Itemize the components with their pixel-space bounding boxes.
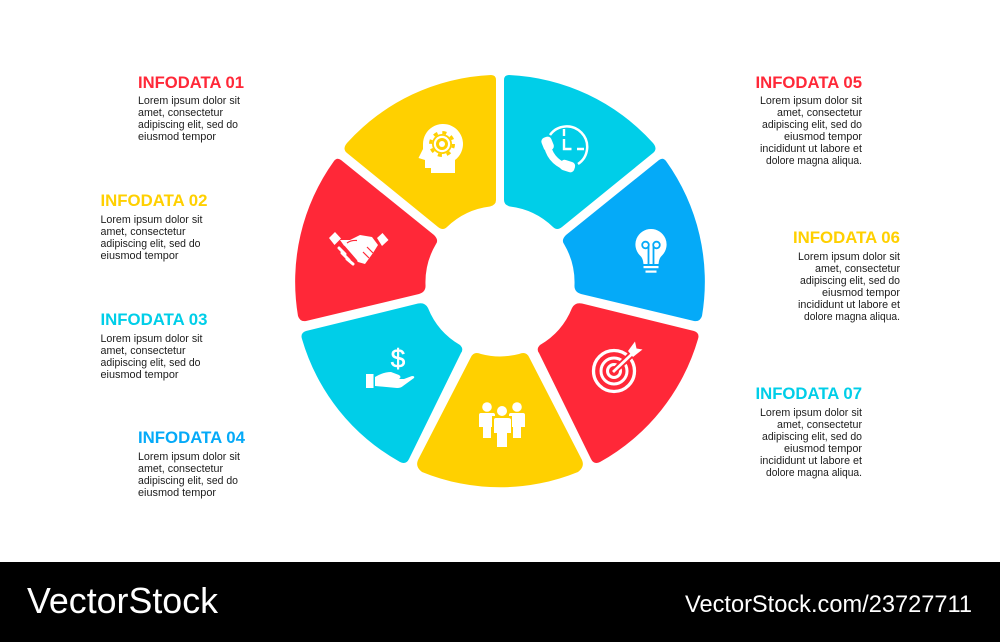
- segment 7: red: [538, 303, 698, 463]
- body 01: [138, 95, 241, 143]
- icon: phone and clock: [540, 126, 587, 173]
- body 07: adipiscing elit, sed do: [762, 431, 862, 443]
- heading 05: INFODATA 05: [756, 73, 862, 92]
- body 07: eiusmod tempor: [784, 443, 862, 455]
- body 04: Lorem ipsum dolor sit: [138, 451, 241, 463]
- body 06: Lorem ipsum dolor sit: [798, 251, 901, 263]
- body 03: amet, consectetur: [100, 345, 186, 357]
- body 01: eiusmod tempor: [138, 131, 216, 143]
- text block: infodata 01: [138, 73, 244, 143]
- footer url text: VectorStock.com/23727711: [685, 591, 972, 618]
- body 06: amet, consectetur: [815, 263, 900, 275]
- body 02: [100, 214, 203, 262]
- body 03: Lorem ipsum dolor sit: [100, 333, 203, 345]
- segment 2: red: [295, 159, 437, 321]
- body 01: amet, consectetur: [138, 107, 223, 119]
- body 06: eiusmod tempor: [822, 287, 900, 299]
- body 03: [100, 333, 203, 381]
- body 01: adipiscing elit, sed do: [138, 119, 238, 131]
- icon: light bulb: [635, 229, 667, 273]
- heading 03: INFODATA 03: [100, 310, 208, 329]
- heading 02: INFODATA 02: [100, 191, 208, 210]
- body 06: incididunt ut labore et: [798, 299, 901, 311]
- footer bar: [0, 562, 1000, 642]
- segment 5: cyan: [504, 75, 656, 229]
- body 06: adipiscing elit, sed do: [800, 275, 900, 287]
- body 04: [138, 451, 241, 499]
- body 07: incididunt ut labore et: [760, 455, 863, 467]
- segment 6: blue: [563, 159, 705, 321]
- icon: hand with dollar: [366, 344, 414, 388]
- heading 06: INFODATA 06: [793, 228, 900, 247]
- icon: target with arrow: [594, 342, 642, 392]
- text block: infodata 03: [100, 310, 208, 381]
- text block: infodata 06: [793, 228, 901, 323]
- panel: circular diagram: [295, 75, 705, 487]
- body 04: amet, consectetur: [138, 463, 223, 475]
- body 02: eiusmod tempor: [100, 250, 179, 262]
- heading 01: INFODATA 01: [138, 73, 244, 92]
- body 02: adipiscing elit, sed do: [100, 238, 200, 250]
- body 05: [760, 95, 863, 167]
- body 02: Lorem ipsum dolor sit: [100, 214, 203, 226]
- body 05: dolore magna aliqua.: [766, 155, 862, 167]
- heading 07: INFODATA 07: [756, 384, 862, 403]
- segment 3: cyan: [302, 303, 462, 463]
- body 03: adipiscing elit, sed do: [100, 357, 200, 369]
- body 05: adipiscing elit, sed do: [762, 119, 862, 131]
- icon: hand with dollar: $: [391, 344, 406, 374]
- body 04: adipiscing elit, sed do: [138, 475, 238, 487]
- text block: infodata 07: [756, 384, 863, 479]
- segment 4: yellow bottom: [417, 353, 583, 487]
- segment 1: yellow: [344, 75, 496, 229]
- footer logo text: VectorStock: [27, 580, 219, 621]
- body 01: Lorem ipsum dolor sit: [138, 95, 241, 107]
- text block: infodata 04: [138, 428, 246, 499]
- body 02: amet, consectetur: [100, 226, 186, 238]
- text block: infodata 02: [100, 191, 208, 262]
- body 07: [760, 407, 863, 479]
- heading 04: INFODATA 04: [138, 428, 246, 447]
- body 04: eiusmod tempor: [138, 487, 216, 499]
- body 03: eiusmod tempor: [100, 369, 179, 381]
- text block: infodata 05: [756, 73, 863, 167]
- body 07: Lorem ipsum dolor sit: [760, 407, 863, 419]
- icon: team of three people: [479, 402, 525, 449]
- body 05: Lorem ipsum dolor sit: [760, 95, 863, 107]
- icon: handshake: [329, 232, 388, 264]
- body 07: amet, consectetur: [777, 419, 862, 431]
- body 06: dolore magna aliqua.: [804, 311, 900, 323]
- icon: head with gear: [418, 124, 463, 173]
- body 06: [798, 251, 901, 323]
- body 05: eiusmod tempor: [784, 131, 862, 143]
- body 05: incididunt ut labore et: [760, 143, 863, 155]
- body 05: amet, consectetur: [777, 107, 862, 119]
- body 07: dolore magna aliqua.: [766, 467, 862, 479]
